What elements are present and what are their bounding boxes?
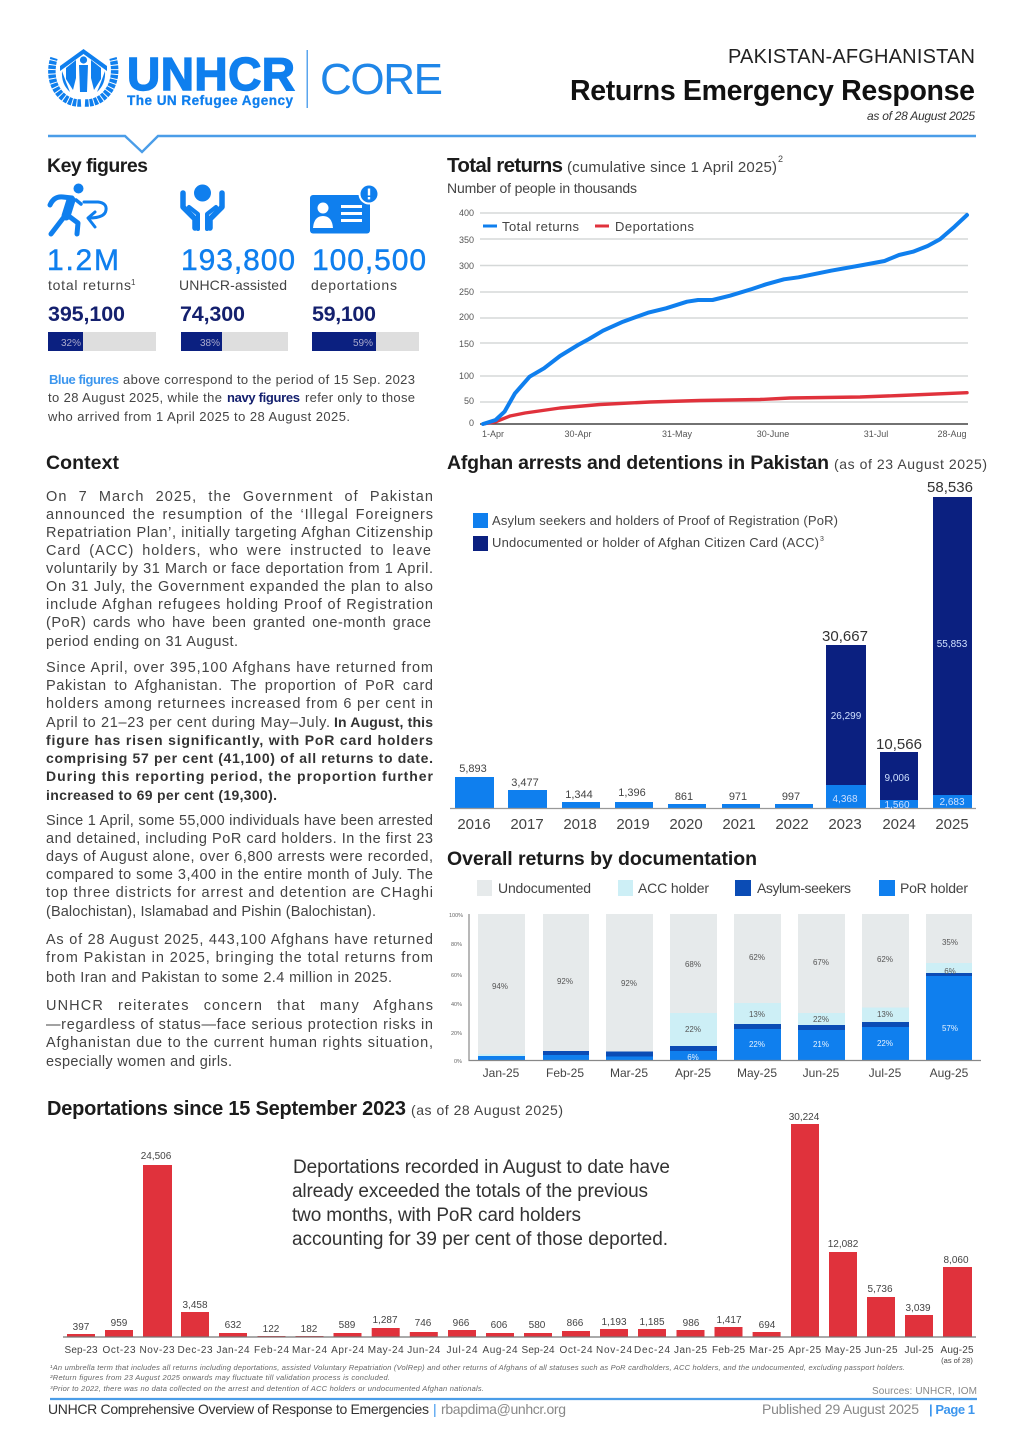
legend xyxy=(483,219,694,234)
bar value labels xyxy=(73,1112,969,1335)
heading: Overall returns by documentation xyxy=(447,848,757,870)
month labels: Jun-25 xyxy=(864,1345,898,1356)
y axis labels: 200 xyxy=(459,312,474,322)
month labels: Jan-25 xyxy=(483,1066,520,1080)
callout: already exceeded the totals of the previous xyxy=(292,1181,648,1202)
paragraph 1: (PoR) cards who have been granted one-month grace xyxy=(46,615,431,631)
paragraph 2: holders among returnees increased from 6 per cent in xyxy=(46,696,433,712)
month labels: Dec-24 xyxy=(634,1345,670,1356)
bar value labels: 4,368 xyxy=(832,794,858,805)
legend xyxy=(477,880,968,896)
year labels: 2021 xyxy=(722,816,756,833)
legend: Deportations xyxy=(615,219,694,234)
y axis labels: 400 xyxy=(459,208,474,218)
month labels: May-25 xyxy=(825,1345,861,1356)
key figures note xyxy=(47,372,415,424)
paragraph 2: comprising 57 per cent (41,100) of all returns to date. xyxy=(46,750,433,766)
paragraph 5 xyxy=(46,998,433,1070)
year labels: 2018 xyxy=(563,816,597,833)
month labels: Oct-23 xyxy=(102,1345,136,1356)
figure: deportations: deportations xyxy=(311,277,397,293)
paragraph 1: announced the resumption of the ‘Illegal Foreigners xyxy=(46,507,433,523)
bar value labels: 966 xyxy=(453,1318,470,1329)
paragraph 1: On 7 March 2025, the Government of Pakistan xyxy=(46,489,433,505)
year labels: 2025 xyxy=(935,816,969,833)
y axis labels: 40% xyxy=(451,1002,462,1008)
callout: two months, with PoR card holders xyxy=(292,1205,581,1226)
icon: hands holding person xyxy=(183,184,222,229)
panel: key figures xyxy=(47,155,426,424)
heading: Afghan arrests and detentions in Pakistan xyxy=(447,452,829,474)
paragraph 2 xyxy=(46,660,434,803)
paragraph 3: days of August alone, over 6,800 arrests were recorded, xyxy=(46,849,433,865)
month labels: Jul-25 xyxy=(869,1066,902,1080)
percentage labels: 6% xyxy=(687,1053,699,1062)
figure: total returns xyxy=(47,244,156,351)
legend: Undocumented or holder of Afghan Citizen Card (ACC) xyxy=(492,535,819,550)
month labels: Aug-25 xyxy=(940,1345,974,1356)
y axis labels: 50 xyxy=(464,396,474,406)
heading: Key figures xyxy=(47,155,148,177)
bar value labels: 1,396 xyxy=(618,787,646,799)
percentage labels: 62% xyxy=(749,953,765,962)
percentage labels: 68% xyxy=(685,960,701,969)
bar value labels: 1,185 xyxy=(639,1317,665,1328)
figure: total returns: 1.2M xyxy=(47,244,119,277)
percentage labels: 22% xyxy=(685,1025,701,1034)
paragraph 2: During this reporting period, the proportion further xyxy=(46,768,434,784)
logo tagline: The UN Refugee Agency xyxy=(127,93,293,108)
heading: Context xyxy=(46,452,120,474)
date: as of 28 August 2025 xyxy=(867,109,975,123)
publication date: Published 29 August 2025 xyxy=(762,1401,919,1417)
paragraph 2: April to 21–23 per cent during May–July. xyxy=(46,715,330,731)
bar value labels: 632 xyxy=(225,1320,242,1331)
sources: Sources: UNHCR, IOM xyxy=(872,1386,977,1397)
month labels: Nov-24 xyxy=(596,1345,632,1356)
paragraph 1: Repatriation Plan’, initially targeting Afghan Citizenship xyxy=(46,525,433,541)
key figures note: refer only to those xyxy=(305,390,415,405)
percentage labels: 57% xyxy=(942,1024,958,1033)
percentage labels: 67% xyxy=(813,958,829,967)
bar value labels: 12,082 xyxy=(828,1239,859,1250)
bar value labels: 986 xyxy=(683,1318,700,1329)
bar value labels: 3,039 xyxy=(905,1303,931,1314)
x axis labels: 30-June xyxy=(757,429,789,439)
bar value labels: 606 xyxy=(491,1320,508,1331)
percentage labels: 22% xyxy=(813,1015,829,1024)
panel: deportations since 15 September 2023 xyxy=(47,1098,976,1365)
month labels: Dec-23 xyxy=(178,1345,213,1356)
month labels: Mar-24 xyxy=(292,1345,327,1356)
legend: ACC holder xyxy=(638,880,709,896)
y axis labels xyxy=(449,913,463,1065)
bar value labels: 182 xyxy=(301,1324,318,1335)
bar value labels: 3,477 xyxy=(511,777,539,789)
x axis labels: 28-Aug xyxy=(937,429,967,439)
CORE label: CORE xyxy=(320,55,443,104)
footer contact: | xyxy=(433,1401,437,1417)
callout: accounting for 39 per cent of those deported. xyxy=(292,1229,668,1250)
bar value labels: 2,683 xyxy=(939,797,965,808)
year labels xyxy=(457,816,969,833)
year labels: 2020 xyxy=(669,816,703,833)
bar value labels: 959 xyxy=(111,1318,128,1329)
bar value labels xyxy=(459,479,973,811)
x axis labels xyxy=(482,429,967,439)
bar value labels: 1,417 xyxy=(716,1315,742,1326)
footnotes: ¹An umbrella term that includes all returns including deportations, assisted Voluntary Repatriation (VolRep) and other returns of Afghans of all statuses such as PoR cardholders, ACC holders, and the undocumented, excluding passport holders. xyxy=(50,1363,905,1372)
panel: total returns line chart: 2 xyxy=(778,154,783,164)
y axis labels: 350 xyxy=(459,235,474,245)
percentage labels: 13% xyxy=(877,1010,893,1019)
logo wordmark: UNHCR xyxy=(127,48,295,100)
figure: total returns: 1 xyxy=(131,278,136,287)
paragraph 2: In August, this xyxy=(334,714,433,730)
figure: total returns: 32% xyxy=(61,338,81,349)
callout: Deportations recorded in August to date have xyxy=(293,1157,670,1178)
footer rule xyxy=(50,1398,977,1400)
percentage labels: 62% xyxy=(877,955,893,964)
paragraph 3 xyxy=(46,813,433,920)
legend: Asylum-seekers xyxy=(757,880,851,896)
key figures note: to 28 August 2025, while the xyxy=(48,390,222,405)
paragraph 1 xyxy=(46,489,433,650)
month labels: Apr-24 xyxy=(331,1345,365,1356)
bar value labels: 1,193 xyxy=(601,1317,627,1328)
percentage labels: 6% xyxy=(944,967,956,976)
bar value labels: 55,853 xyxy=(937,639,968,650)
footnotes: ²Return figures from 23 August 2025 onwards may fluctuate till validation process is concluded. xyxy=(50,1373,390,1382)
month labels: May-24 xyxy=(368,1345,404,1356)
key figures note: who arrived from 1 April 2025 to 28 August 2025. xyxy=(47,409,350,424)
stacked percentage bars xyxy=(478,914,972,1060)
month labels: Sep-24 xyxy=(522,1345,555,1356)
paragraph 4: As of 28 August 2025, 443,100 Afghans have returned xyxy=(46,932,433,948)
bar value labels: 861 xyxy=(675,791,693,803)
month labels: (as of 28) xyxy=(941,1356,973,1365)
bar value labels: 10,566 xyxy=(876,736,922,753)
x axis labels: 30-Apr xyxy=(564,429,592,439)
x axis labels: 31-Jul xyxy=(864,429,888,439)
main title: Returns Emergency Response xyxy=(570,75,975,107)
year labels: 2017 xyxy=(510,816,544,833)
month labels: Feb-24 xyxy=(254,1345,289,1356)
bar value labels: 122 xyxy=(263,1324,280,1335)
month labels: Jun-25 xyxy=(803,1066,840,1080)
bar value labels: 58,536 xyxy=(927,479,973,496)
month labels xyxy=(483,1066,969,1080)
paragraph 1: Card (ACC) holders, who were instructed to leave xyxy=(46,543,431,559)
percentage labels: 94% xyxy=(492,982,508,991)
bar value labels: 1,344 xyxy=(565,789,593,801)
percentage labels: 13% xyxy=(749,1010,765,1019)
x axis labels: 31-May xyxy=(662,429,693,439)
legend: Asylum seekers and holders of Proof of Registration (PoR) xyxy=(492,513,838,528)
month labels: Mar-25 xyxy=(610,1066,648,1080)
y axis labels: 0% xyxy=(454,1059,462,1065)
bar value labels: 746 xyxy=(415,1318,432,1329)
legend: Undocumented xyxy=(498,880,591,896)
paragraph 3: Since 1 April, some 55,000 individuals have been arrested xyxy=(46,813,433,829)
figure: UNHCR-assisted: 193,800 xyxy=(181,244,295,277)
month labels: Mar-25 xyxy=(749,1345,785,1356)
month labels: Aug-25 xyxy=(930,1066,969,1080)
subtitle: Number of people in thousands xyxy=(447,180,637,196)
year labels: 2016 xyxy=(457,816,491,833)
figure: UNHCR-assisted: UNHCR-assisted xyxy=(179,277,287,293)
percentage labels: 35% xyxy=(942,938,958,947)
month labels xyxy=(64,1345,974,1365)
figure: UNHCR-assisted xyxy=(179,244,295,351)
percentage labels xyxy=(492,938,958,1062)
bar value labels: 1,287 xyxy=(372,1315,398,1326)
year labels: 2022 xyxy=(775,816,809,833)
paragraph 2: increased to 69 per cent (19,300). xyxy=(46,787,277,803)
stacked bars xyxy=(455,497,972,808)
paragraph 4: both Iran and Pakistan to some 2.4 million in 2025. xyxy=(46,970,392,986)
heading date: (as of 28 August 2025) xyxy=(411,1102,563,1118)
paragraph 1: period ending on 31 August. xyxy=(46,634,238,650)
paragraph 2: Pakistan to Afghanistan. The proportion of PoR card xyxy=(46,678,433,694)
paragraph 3: top three districts for arrest and detention are CHaghi xyxy=(46,885,433,901)
legend xyxy=(473,513,838,551)
icon: person returning xyxy=(50,184,106,234)
month labels: Nov-23 xyxy=(140,1345,175,1356)
y axis labels: 100% xyxy=(449,913,463,919)
bar value labels: 30,224 xyxy=(789,1112,820,1123)
bar value labels: 580 xyxy=(529,1320,546,1331)
panel: context xyxy=(46,452,434,1070)
heading date: (as of 23 August 2025) xyxy=(834,456,987,472)
series: total returns xyxy=(483,215,967,424)
bar value labels: 866 xyxy=(567,1318,584,1329)
bar value labels: 8,060 xyxy=(943,1255,969,1266)
bar value labels: 26,299 xyxy=(831,711,862,722)
month labels: Sep-23 xyxy=(64,1345,98,1356)
footnotes: ³Prior to 2022, there was no data collected on the arrest and detention of ACC holders or undocumented Afghan nationals. xyxy=(50,1384,484,1393)
y axis labels: 0 xyxy=(469,418,474,428)
bar value labels: 694 xyxy=(759,1320,776,1331)
figure: total returns: total returns xyxy=(48,277,131,293)
icon: UNHCR emblem xyxy=(52,49,115,103)
heading qualifier: (cumulative since 1 April 2025) xyxy=(567,159,777,176)
percentage labels: 21% xyxy=(813,1040,829,1049)
month labels: Jun-24 xyxy=(407,1345,441,1356)
percentage labels: 92% xyxy=(621,979,637,988)
y axis labels: 60% xyxy=(451,973,462,979)
month labels: Feb-25 xyxy=(546,1066,584,1080)
bar value labels: 397 xyxy=(73,1322,90,1333)
month labels: Feb-25 xyxy=(712,1345,745,1356)
year labels: 2024 xyxy=(882,816,916,833)
y axis labels: 250 xyxy=(459,287,474,297)
year labels: 2019 xyxy=(616,816,650,833)
paragraph 1: include Afghan refugees holding Proof of Registration xyxy=(46,597,433,613)
footer xyxy=(48,1401,975,1417)
footer title: UNHCR Comprehensive Overview of Response to Emergencies xyxy=(48,1401,429,1417)
y axis labels: 80% xyxy=(451,942,462,948)
icon: ID card with alert xyxy=(310,184,380,234)
y axis labels: 100 xyxy=(459,371,474,381)
heading: Deportations since 15 September 2023 xyxy=(47,1098,406,1120)
percentage labels: 92% xyxy=(557,977,573,986)
country label: PAKISTAN-AFGHANISTAN xyxy=(728,46,975,68)
header logo xyxy=(52,48,443,108)
title block xyxy=(570,46,975,123)
legend: PoR holder xyxy=(900,880,968,896)
footnotes xyxy=(50,1363,905,1393)
bar value labels: 3,458 xyxy=(182,1300,208,1311)
y axis labels: 20% xyxy=(451,1031,462,1037)
paragraph 1: voluntarily by 31 March or face deportation from 1 April. xyxy=(46,561,433,577)
bar value labels: 9,006 xyxy=(884,773,910,784)
year labels: 2023 xyxy=(828,816,862,833)
key figures note: navy figures xyxy=(227,390,300,405)
month labels: Oct-24 xyxy=(560,1345,593,1356)
header rule with notch xyxy=(48,136,976,152)
paragraph 3: (Balochistan), Islamabad and Pishin (Balochistan). xyxy=(46,904,376,920)
page number: | Page 1 xyxy=(929,1402,975,1417)
x axis labels: 1-Apr xyxy=(482,429,504,439)
month labels: Jan-24 xyxy=(216,1345,250,1356)
bar value labels: 971 xyxy=(729,791,747,803)
figure: deportations xyxy=(311,244,426,351)
bar value labels: 589 xyxy=(339,1320,356,1331)
paragraph 3: and detained, including PoR card holders. In the first 23 xyxy=(46,831,433,847)
bar value labels: 30,667 xyxy=(822,628,868,645)
month labels: Jan-25 xyxy=(674,1345,707,1356)
figure: UNHCR-assisted: 74,300 xyxy=(180,302,245,326)
panel: overall returns by documentation xyxy=(447,848,981,1080)
panel: Afghan arrests and detentions xyxy=(447,452,987,833)
bar chart xyxy=(67,1124,972,1337)
bar value labels: 997 xyxy=(782,791,800,803)
footer: rbapdima@unhcr.org xyxy=(441,1401,566,1417)
bar value labels: 5,736 xyxy=(867,1284,893,1295)
month labels: Apr-25 xyxy=(675,1066,711,1080)
figure: deportations: 59,100 xyxy=(312,302,376,326)
paragraph 5: Afghanistan due to the current human rights situation, xyxy=(46,1035,433,1051)
paragraph 2: figure has risen significantly, with PoR card holders xyxy=(46,732,433,748)
legend: 3 xyxy=(820,536,824,543)
figure: total returns: 395,100 xyxy=(48,302,125,326)
paragraph 5: especially women and girls. xyxy=(46,1054,232,1070)
heading: Total returns xyxy=(447,154,563,177)
y axis labels xyxy=(459,208,474,428)
figure: UNHCR-assisted: 38% xyxy=(200,338,220,349)
figure: deportations: 59% xyxy=(353,338,373,349)
panel: total returns line chart xyxy=(447,154,968,439)
month labels: May-25 xyxy=(737,1066,777,1080)
callout xyxy=(292,1157,670,1250)
percentage labels: 22% xyxy=(749,1040,765,1049)
paragraph 2: Since April, over 395,100 Afghans have returned from xyxy=(46,660,433,676)
bar value labels: 1,560 xyxy=(884,800,910,811)
month labels: Aug-24 xyxy=(482,1345,518,1356)
figure: deportations: 100,500 xyxy=(312,244,426,277)
paragraph 4: from Pakistan in 2025, bringing the total returns from xyxy=(46,950,433,966)
month labels: Apr-25 xyxy=(788,1345,822,1356)
series: deportations xyxy=(483,393,967,424)
paragraph 5: UNHCR reiterates concern that many Afghans xyxy=(46,998,433,1014)
legend: Total returns xyxy=(502,219,580,234)
bar value labels: 5,893 xyxy=(459,763,487,775)
paragraph 1: On 31 July, the Government expanded the plan to also xyxy=(46,579,433,595)
paragraph 4 xyxy=(46,932,433,986)
paragraph 5: —regardless of status—face serious protection risks in xyxy=(46,1017,433,1033)
y axis labels: 300 xyxy=(459,261,474,271)
bar value labels: 24,506 xyxy=(141,1151,172,1162)
month labels: Jul-24 xyxy=(446,1345,478,1356)
percentage labels: 22% xyxy=(877,1039,893,1048)
paragraph 3: compared to some 3,400 in the entire month of July. The xyxy=(46,867,433,883)
key figures note: Blue figures xyxy=(49,372,119,387)
y axis labels: 150 xyxy=(459,339,474,349)
key figures note: above correspond to the period of 15 Sep. 2023 xyxy=(123,372,415,387)
month labels: Jul-25 xyxy=(904,1345,934,1356)
